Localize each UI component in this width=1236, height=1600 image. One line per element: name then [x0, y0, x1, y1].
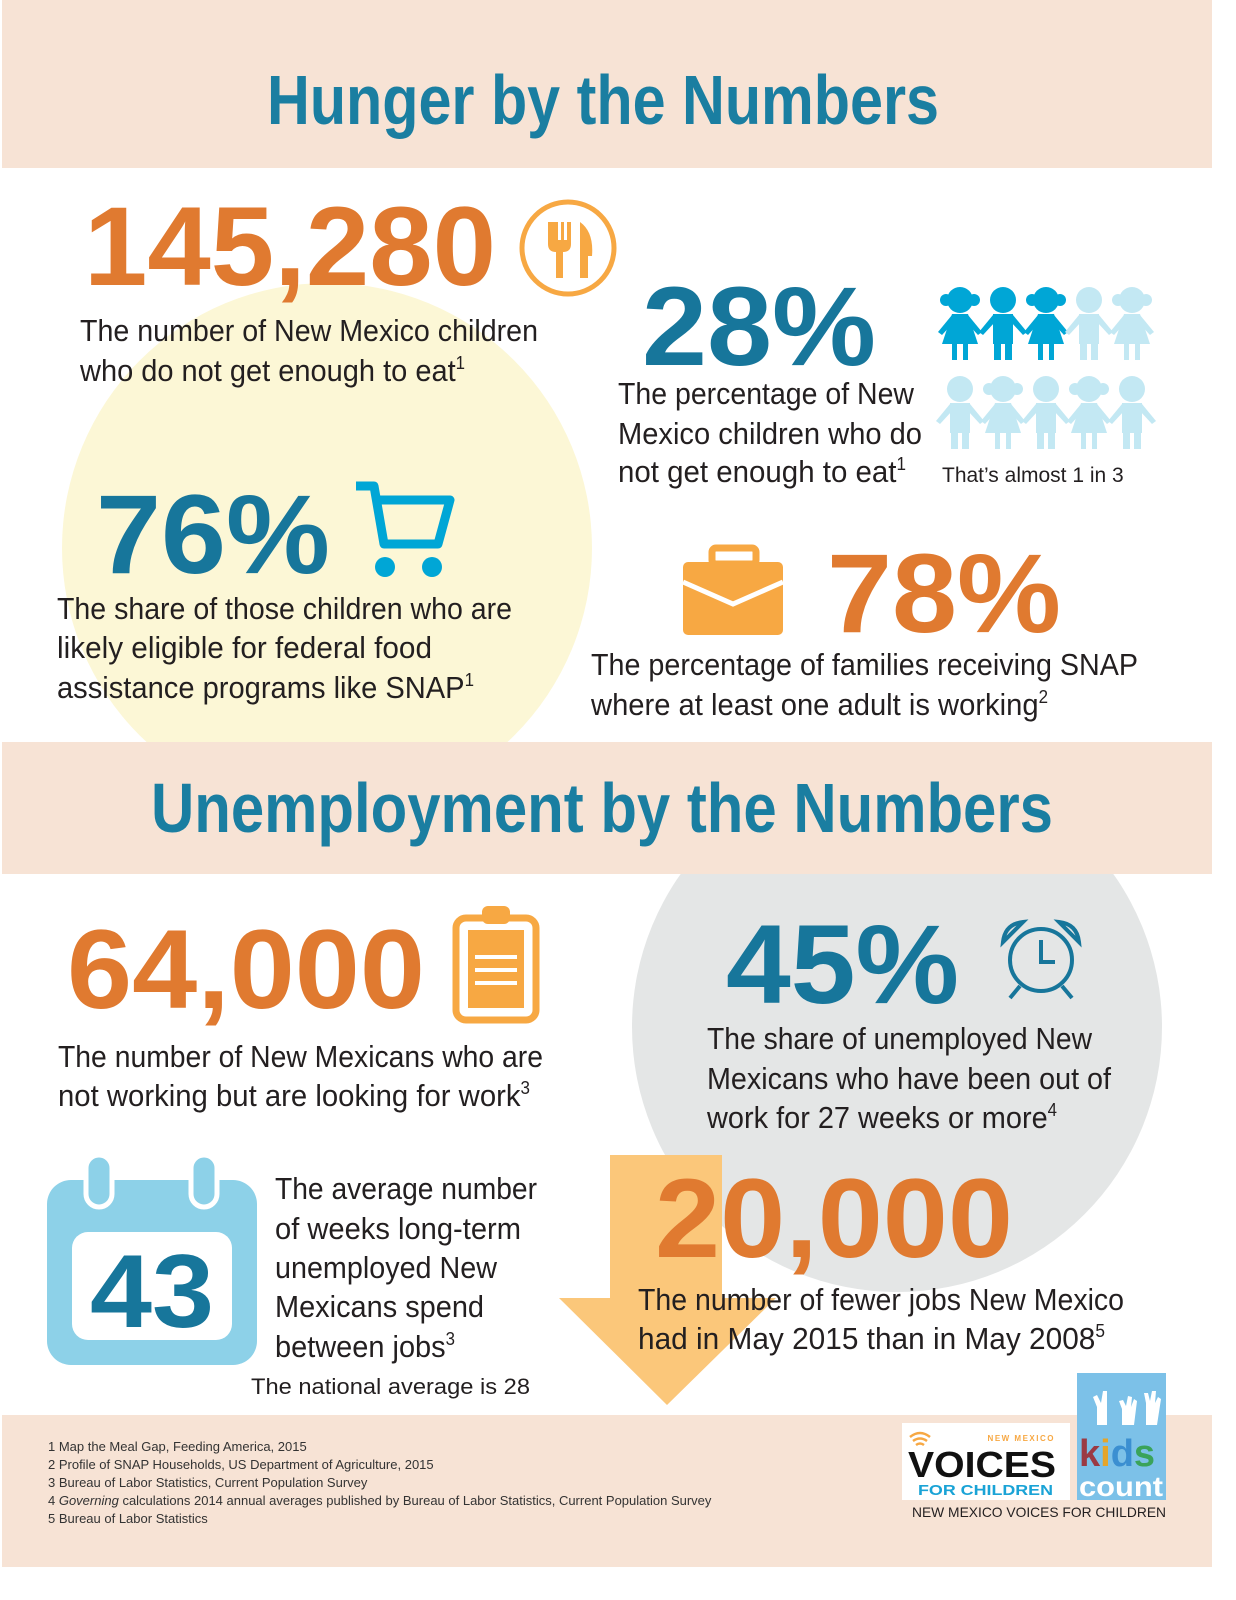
stat: 145,280: who do not get enough to eat	[80, 353, 482, 388]
stat: 64,000: 3	[521, 1078, 530, 1098]
icon: shopping cart	[356, 486, 450, 577]
footnotes: 1 Map the Meal Gap, Feeding America, 2015	[48, 1439, 307, 1454]
stat text: 43 weeks: 3	[446, 1329, 455, 1349]
icon: calendar 43: 43	[90, 1234, 214, 1350]
stat text: 43 weeks: between jobs	[275, 1329, 458, 1364]
stat text: 43 weeks: The average number	[275, 1171, 537, 1206]
icon: briefcase	[683, 548, 783, 635]
stat: 20,000	[638, 1156, 1124, 1356]
stat: 64,000	[58, 907, 543, 1113]
stat: 76%: 1	[465, 670, 474, 690]
stat: 78%: 2	[1039, 687, 1048, 707]
stat text: 43 weeks: of weeks long-term	[275, 1211, 521, 1246]
icon: calendar 43	[47, 1155, 257, 1365]
logo: kids count: kids	[1079, 1433, 1155, 1475]
footnotes	[48, 1439, 712, 1526]
stat: 76%: The share of those children who are	[57, 591, 512, 626]
stat: 145,280: The number of New Mexico children	[80, 313, 538, 348]
stat: 76%: 76%	[96, 472, 330, 597]
stat: 76%	[57, 472, 512, 705]
stat: 45%: work for 27 weeks or more	[707, 1100, 1072, 1135]
grey background circle	[632, 762, 1162, 1292]
footer band	[2, 1415, 1212, 1567]
stat: 45%: The share of unemployed New	[707, 1021, 1093, 1056]
header band: hunger	[2, 0, 1212, 168]
stat: 45%: 4	[1048, 1100, 1057, 1120]
logo: voices for children	[902, 1423, 1070, 1500]
stat: 28%: 28%	[642, 264, 876, 389]
stat: 28%: not get enough to eat	[618, 454, 911, 489]
stat: 45%	[706, 902, 1111, 1135]
icon: fork and knife	[522, 202, 614, 294]
caption: almost 1 in 3: That’s almost 1 in 3	[942, 464, 1124, 487]
stat: 20,000: 5	[1095, 1321, 1105, 1341]
stat: 64,000: 64,000	[67, 907, 425, 1032]
stat: 145,280: 145,280	[84, 184, 496, 309]
logo: kids count	[1077, 1373, 1166, 1502]
stat: 28%: 1	[896, 454, 906, 474]
stat: 64,000: The number of New Mexicans who are	[58, 1039, 543, 1074]
logo: voices for children: FOR CHILDREN	[918, 1482, 1053, 1499]
stat: 78%: The percentage of families receiving SNAP	[591, 647, 1138, 682]
stat text: 43 weeks: Mexicans spend	[275, 1289, 484, 1324]
stat: 78%: where at least one adult is working	[591, 687, 1067, 722]
yellow background circle	[0, 283, 1236, 813]
stat: 145,280	[79, 184, 538, 388]
icon: alarm clock	[1003, 922, 1079, 998]
stat: 76%: assistance programs like SNAP	[57, 670, 491, 705]
logo: voices for children: VOICES	[908, 1444, 1056, 1485]
stat: 28%: The percentage of New	[618, 376, 915, 411]
icon: children figures	[936, 287, 1156, 449]
icon: clipboard	[456, 906, 536, 1020]
logo: voices for children: NEW MEXICO	[988, 1434, 1055, 1443]
stat: 145,280: 1	[456, 353, 465, 373]
stat text: 43 weeks: unemployed New	[275, 1250, 498, 1285]
footnotes: 3 Bureau of Labor Statistics, Current Population Survey	[48, 1475, 368, 1490]
stat: 78%	[590, 531, 1138, 722]
stat: 20,000: had in May 2015 than in May 2008	[638, 1321, 1114, 1356]
footnotes: 5 Bureau of Labor Statistics	[48, 1511, 208, 1526]
header band: unemployment	[2, 742, 1212, 874]
logo: kids count: count	[1079, 1471, 1163, 1502]
title: hunger: Hunger by the Numbers	[267, 61, 939, 139]
footnotes: 4 Governing calculations 2014 annual averages published by Bureau of Labor Statistics, Current Population Survey	[48, 1493, 712, 1508]
arrow: down	[559, 1155, 776, 1405]
stat: 45%: Mexicans who have been out of	[707, 1061, 1111, 1096]
stat text: 43 weeks	[251, 1171, 537, 1399]
stat: 78%: 78%	[827, 531, 1061, 656]
footnotes: 2 Profile of SNAP Households, US Department of Agriculture, 2015	[48, 1457, 434, 1472]
stat: 28%: Mexico children who do	[618, 416, 922, 451]
stat: 76%: likely eligible for federal food	[57, 630, 432, 665]
stat: 20,000: 20,000	[655, 1156, 1013, 1281]
stat: 45%: 45%	[726, 902, 959, 1027]
stat text: 43 weeks: The national average is 28	[251, 1374, 530, 1399]
stat: 20,000: The number of fewer jobs New Mexico	[638, 1282, 1124, 1317]
stat: 64,000: not working but are looking for work	[58, 1078, 547, 1113]
title: unemployment: Unemployment by the Numbers	[151, 769, 1053, 847]
org name: NEW MEXICO VOICES FOR CHILDREN	[912, 1504, 1166, 1520]
stat: 28%	[618, 264, 922, 489]
